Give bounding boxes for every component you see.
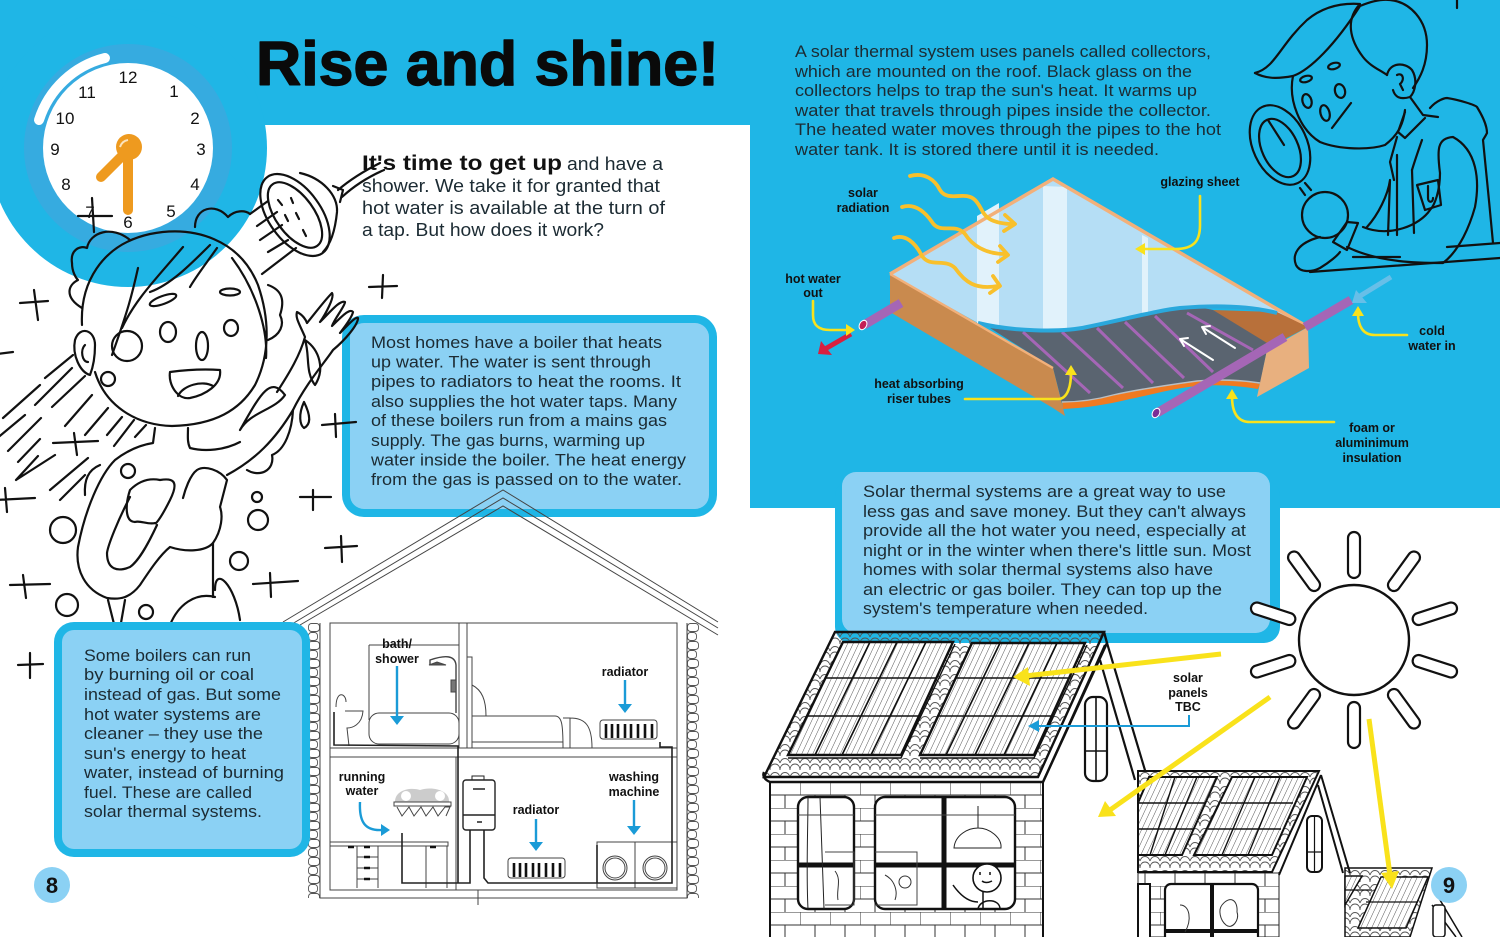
clock: 11: [78, 83, 96, 102]
solar panels label and arrow: [1028, 671, 1208, 732]
house roof: [283, 490, 718, 635]
collector base: [990, 308, 1308, 409]
panel: boilers text box: from the gas is passed on to the water.: [371, 471, 682, 489]
clock: 10: [56, 109, 74, 128]
collector labels: out: [803, 286, 824, 300]
gable wall: [1043, 643, 1147, 782]
panel: solar systems text box: provide all the hot water you need, especially at: [863, 522, 1246, 540]
illustration: second house: [1138, 771, 1350, 937]
kitchen: [330, 788, 451, 888]
clock: 8: [61, 175, 71, 194]
panel: other fuels text box: solar thermal systems.: [84, 803, 262, 821]
diagram labels: shower: [375, 652, 419, 666]
solar radiation waves: [894, 175, 1015, 293]
intro text: [362, 152, 666, 240]
riser tubes: [1023, 313, 1253, 393]
panel: boilers text box: [342, 315, 717, 517]
diagram arrows: [360, 666, 641, 851]
collector labels: riser tubes: [887, 392, 951, 406]
clock: 4: [190, 175, 200, 194]
collector labels: glazing sheet: [1160, 175, 1240, 189]
illustration: boy with magnifying glass: [1238, 0, 1500, 272]
solar thermal intro text: water tank. It is stored there until it is needed.: [794, 141, 1159, 159]
icon: water sparkles: [0, 198, 397, 678]
brick columns and walls: [308, 623, 699, 905]
yellow sun ray arrows: [1013, 654, 1399, 889]
diagram labels: machine: [609, 785, 659, 799]
arrow: cold water in: [1352, 277, 1391, 303]
solar thermal intro text: A solar thermal system uses panels called collectors,: [795, 43, 1211, 61]
panel: other fuels text box: by burning oil or coal: [84, 666, 254, 684]
icon: shower head: [246, 162, 384, 274]
collector glass: [890, 179, 1308, 332]
clock: [24, 44, 232, 252]
collector labels: cold: [1419, 324, 1445, 338]
panel: solar systems text box: Solar thermal systems are a great way to use: [863, 483, 1226, 501]
solar panels label and arrow: panels: [1168, 686, 1208, 700]
tiled roof: [764, 643, 1099, 782]
clock: 7: [85, 203, 95, 222]
collector labels: [785, 175, 1456, 465]
panel: other fuels text box: hot water systems are: [84, 706, 261, 724]
pipe ends: [857, 319, 1162, 419]
intro text: and have a: [567, 154, 664, 174]
panel: solar systems text box: less gas and save money. But they can't always: [863, 503, 1246, 521]
brick wall: [770, 782, 1043, 937]
solar panel right: [920, 643, 1087, 758]
solar thermal intro text: which are mounted on the roof. Black glass on the: [794, 63, 1192, 81]
panel: other fuels text box: water, instead of burning: [83, 764, 284, 782]
panel: solar systems text box: system's temperature when needed.: [863, 600, 1148, 618]
glass edge: [978, 306, 1277, 330]
panel: other fuels text box: cleaner – they use the: [84, 725, 263, 743]
water flow arrows: [1180, 326, 1235, 360]
panel: other fuels text box: instead of gas. But some: [84, 686, 281, 704]
intro text: a tap. But how does it work?: [362, 220, 604, 240]
illustration: boiler house diagram: [283, 490, 718, 905]
illustration: main house with solar panels: [763, 632, 1147, 937]
solar thermal intro text: water that travels through pipes inside the collector.: [794, 102, 1211, 120]
panel: solar systems text box: an electric or gas boiler. They can top up the: [863, 581, 1222, 599]
clock: 6: [123, 213, 133, 232]
collector labels: hot water: [785, 272, 841, 286]
collector labels: solar: [848, 186, 878, 200]
illustration: girl in the shower: [0, 162, 397, 678]
panel: boilers text box: pipes to radiators to heat the rooms. It: [371, 373, 681, 391]
diagram labels: water: [345, 784, 378, 798]
panel: solar systems text box: night or in the winter when there's little sun. Most: [863, 542, 1251, 560]
collector labels: heat absorbing: [874, 377, 964, 391]
solar thermal intro text: collectors helps to trap the sun's heat. It warms up: [795, 82, 1197, 100]
page number 8: [34, 867, 70, 903]
panel: boilers text box: water inside the boiler. The heat energy: [370, 452, 687, 470]
solar thermal intro text: [794, 43, 1221, 159]
bathroom fittings: [336, 657, 459, 746]
clock: 2: [190, 109, 200, 128]
panel: other fuels text box: Some boilers can run: [84, 647, 251, 665]
collector sides: [890, 274, 1309, 416]
icon: foam and head: [70, 209, 358, 640]
solar panels label and arrow: TBC: [1175, 700, 1201, 714]
windows: [798, 797, 1015, 909]
arrow: hot water out: [818, 334, 851, 355]
icon: sun: [1249, 532, 1459, 748]
washing machines: [597, 842, 677, 888]
title: Rise and shine!: [256, 30, 719, 99]
clock: 12: [119, 68, 137, 87]
clock: 5: [166, 202, 176, 221]
clock: 3: [196, 140, 206, 159]
panel: boilers text box: supply. The gas burns, warming up: [371, 432, 645, 450]
solar panel left: [788, 642, 955, 758]
clock: 9: [50, 140, 60, 159]
collector labels: insulation: [1342, 451, 1402, 465]
intro text: It's time to get up: [362, 152, 562, 175]
solar panels label and arrow: solar: [1173, 671, 1203, 685]
diagram labels: radiator: [602, 665, 648, 679]
panel: other fuels text box: [54, 622, 310, 857]
diagram labels: radiator: [513, 803, 559, 817]
collector labels: foam or: [1349, 421, 1395, 435]
diagram labels: bath/: [382, 637, 412, 651]
page number 8: 8: [46, 873, 58, 898]
panel: boilers text box: of these boilers run from a mains gas: [371, 412, 667, 430]
page number 9: [1431, 867, 1467, 903]
panel: boilers text box: Most homes have a boiler that heats: [371, 334, 662, 352]
intro text: shower. We take it for granted that: [362, 176, 660, 196]
collector labels: aluminimum: [1335, 436, 1409, 450]
illustration: third house: [1345, 868, 1462, 937]
hot water pipes: [334, 712, 672, 883]
clock: 1: [169, 82, 179, 101]
diagram labels: running: [339, 770, 385, 784]
diagram labels: [339, 637, 659, 817]
collector labels: radiation: [837, 201, 889, 215]
chart: solar collector diagram: [785, 175, 1456, 465]
icon: bubbles: [50, 464, 268, 619]
bedroom furniture: [467, 657, 592, 748]
collector labels: water in: [1407, 339, 1456, 353]
solar thermal intro text: The heated water moves through the pipes to the hot: [795, 121, 1221, 139]
page number 9: 9: [1443, 873, 1455, 898]
gable window: [1085, 697, 1107, 781]
boiler: [463, 776, 495, 830]
panel: other fuels text box: sun's energy to heat: [84, 745, 246, 763]
icon: shower spray: [0, 355, 146, 500]
panel: boilers text box: also supplies the hot water taps. Many: [371, 393, 678, 411]
radiators: [508, 720, 657, 878]
panel: solar systems text box: homes with solar thermal systems also have: [863, 561, 1213, 579]
panel: other fuels text box: fuel. These are called: [84, 784, 252, 802]
intro text: hot water is available at the turn of: [362, 198, 666, 218]
panel: solar systems text box: [835, 472, 1280, 643]
yellow leader lines: [813, 196, 1407, 422]
header pipes: [864, 300, 1351, 413]
diagram labels: washing: [608, 770, 659, 784]
panel: boilers text box: up water. The water is sent through: [371, 354, 651, 372]
